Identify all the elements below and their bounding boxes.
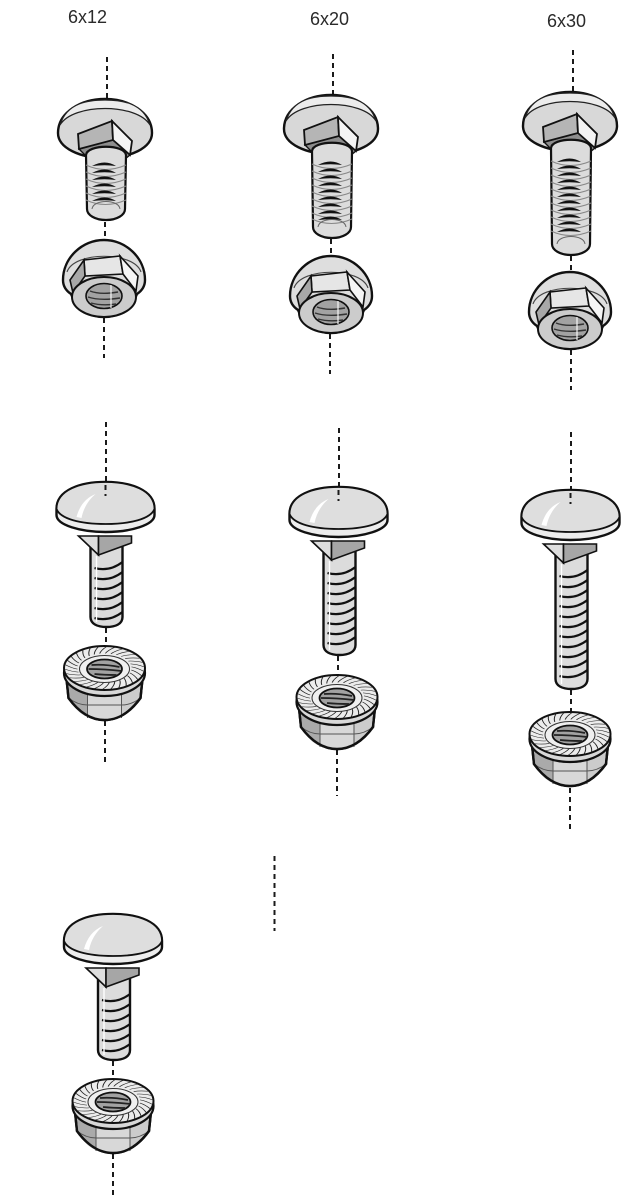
axis line: [337, 428, 339, 796]
bolt set 6x12: [58, 57, 152, 358]
bolt set row 3: [64, 914, 162, 1199]
label: 6x20: 6x20: [310, 9, 349, 29]
flange nut: [64, 646, 145, 720]
bolt: [290, 487, 388, 655]
bolt set row 2 right: [522, 432, 620, 833]
bolt: [284, 95, 378, 238]
label: 6x30: 6x30: [547, 11, 586, 31]
axis line: [571, 50, 573, 390]
cap nut: [529, 272, 611, 349]
bolt set 6x30: [523, 50, 617, 390]
bolt set 6x20: [284, 54, 378, 374]
flange nut: [530, 712, 610, 786]
bolt: [56, 482, 154, 627]
axis line: [570, 432, 571, 833]
bolt set row 2 left: [56, 422, 154, 766]
bolt: [64, 914, 162, 1060]
axis line: [112, 1061, 114, 1199]
axis line: [330, 54, 333, 374]
axis line: [104, 57, 107, 358]
stray axis line: [274, 856, 276, 931]
label: 6x12: 6x12: [68, 7, 107, 27]
flange nut: [296, 675, 378, 749]
bolt set row 2 middle: [290, 428, 388, 796]
cap nut: [290, 256, 372, 333]
bolt: [523, 92, 617, 255]
bolt: [58, 99, 152, 220]
flange nut: [72, 1079, 154, 1153]
cap nut: [63, 240, 145, 317]
axis line: [105, 422, 106, 766]
bolt: [522, 490, 620, 689]
